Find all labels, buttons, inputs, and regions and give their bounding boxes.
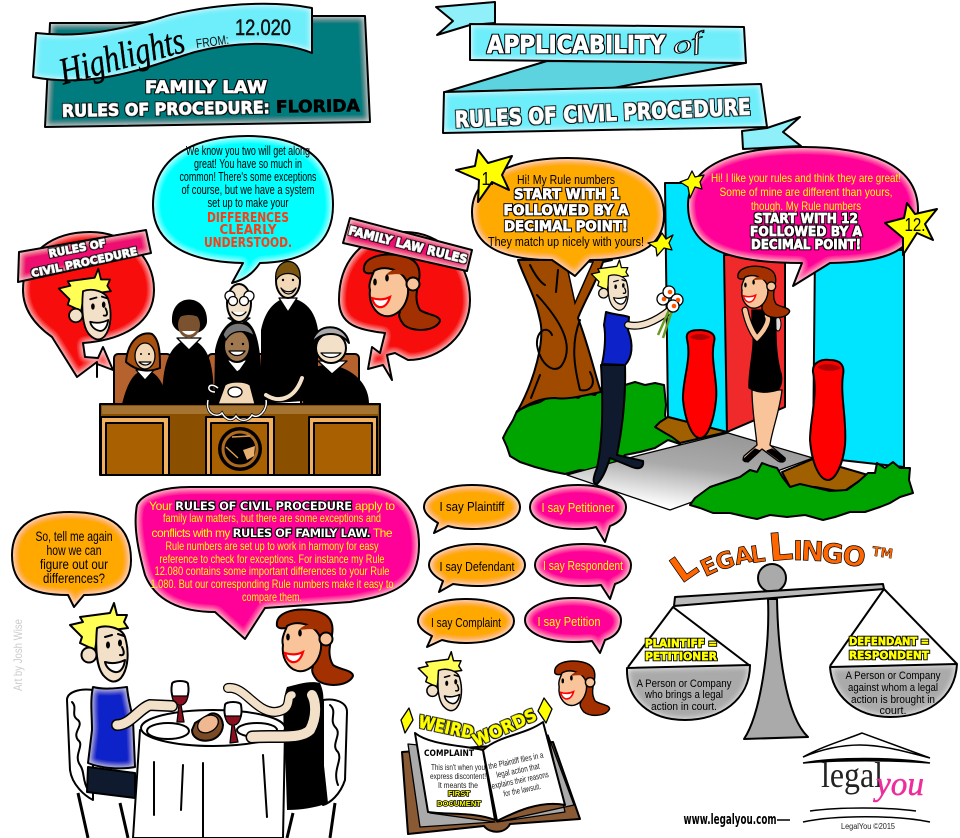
speech bubble: man at tree: DECIMAL POINT!	[504, 219, 628, 235]
bubble: i say respondent: I say Respondent	[543, 558, 623, 573]
speech bubble: your rules of civil procedure: compare them.	[242, 590, 302, 604]
judge: bald man with glasses	[214, 284, 262, 404]
heading: weird words: WORDS	[470, 705, 540, 751]
man arm	[117, 705, 172, 725]
speech bubble: so tell me again: figure out our	[40, 556, 108, 572]
speech bubble: your rules of civil procedure: 1.080. But our corresponding Rule numbers make it easy to	[150, 577, 394, 591]
book text left: DOCUMENT	[437, 801, 482, 808]
book page stack right	[497, 735, 574, 822]
ribbon label: family law rules: FAMILY LAW RULES	[347, 224, 469, 267]
wine glass right	[224, 702, 242, 743]
speech bubble: your rules of civil procedure: conflicts with my RULES OF FAMILY LAW. The	[152, 526, 393, 540]
heading: family law rules of procedure florida	[62, 78, 361, 122]
right bush	[690, 462, 913, 520]
bubble: i say defendant: I say Defendant	[440, 559, 515, 574]
bubble: i say plaintiff	[424, 485, 520, 533]
legs	[594, 365, 643, 484]
heading: family law rules of procedure florida: FLORIDA	[276, 96, 361, 118]
book text right: legal action that	[495, 761, 541, 780]
icon: star number 12	[885, 203, 937, 255]
ribbon: highlights from 12.020: Highlights	[54, 20, 189, 93]
website url: www.legalyou.com	[684, 812, 776, 828]
credit: art by josh wise: Art by Josh Wise	[11, 619, 25, 691]
shoes	[743, 449, 785, 462]
speech bubble: judges: DIFFERENCES	[207, 211, 289, 226]
speech bubble: judges: common! There's some exceptions	[180, 169, 317, 184]
speech bubble: woman at door: FOLLOWED BY A	[750, 225, 862, 240]
heading: legallingo: LEGALLINGO	[663, 524, 868, 591]
speech bubble: judges: of course, but we have a system	[182, 182, 314, 197]
speech bubble: your rules of civil procedure: family law matters, but there are some exceptions and	[163, 511, 381, 525]
bench panel left	[101, 417, 169, 475]
logo wordmark: legal: legal	[821, 755, 883, 795]
speech bubble: judges: set up to make your	[208, 195, 289, 210]
man pants	[87, 767, 135, 798]
speech bubble: man at tree: Hi! My Rule numbers	[517, 172, 615, 187]
ribbon: highlights from 12.020	[33, 4, 312, 93]
left pan: action in court.	[651, 701, 717, 713]
heading: family law rules of procedure florida: FAMILY LAW	[145, 78, 267, 98]
left pan: A Person or Company	[636, 678, 732, 690]
scale ball	[758, 564, 786, 592]
bubble: i say respondent	[535, 544, 631, 599]
dirt left	[655, 417, 727, 443]
icon: small man head	[418, 652, 462, 711]
right pan	[830, 589, 957, 717]
ribbon label: rules of civil procedure: CIVIL PROCEDURE	[30, 246, 138, 280]
speech bubble: woman at door: DECIMAL POINT!	[751, 238, 861, 253]
right pan: DEFENDANT =	[849, 635, 929, 648]
book text right: explains their reasons	[491, 769, 549, 791]
woman arm front	[252, 695, 315, 737]
icon: left diamond	[401, 708, 413, 733]
plates	[147, 723, 189, 739]
icon: man head	[59, 269, 111, 339]
ribbon upper with applicability	[470, 24, 746, 63]
book text left: COMPLAINT	[424, 749, 474, 759]
judge: center with grey hair	[213, 323, 264, 404]
vase right	[810, 360, 845, 480]
speech bubble: woman at door: START WITH 12	[754, 212, 858, 227]
heading: weird words: WEIRD	[417, 713, 476, 744]
speech bubble: judges: UNDERSTOOD.	[204, 236, 292, 251]
legalyou logo	[803, 733, 930, 831]
man shirt outline	[88, 687, 135, 768]
speech bubble: judges	[153, 136, 333, 283]
doorknob	[775, 317, 781, 331]
weird words book	[401, 698, 580, 834]
man shirt	[88, 687, 135, 768]
dress	[749, 310, 782, 392]
chair left	[67, 689, 128, 838]
book text left: This isn't when you	[431, 762, 485, 772]
judge: right with grey hair	[266, 327, 369, 404]
logo wordmark: you: you	[873, 766, 924, 803]
heading: weird words	[417, 705, 540, 751]
book text left: FIRST	[448, 791, 471, 798]
judges bench illustration	[100, 261, 380, 475]
door	[724, 255, 785, 432]
judge: woman left with auburn hair	[122, 333, 168, 404]
teal banner panel	[45, 16, 370, 127]
bubble: i say petitioner: I say Petitioner	[542, 500, 615, 515]
icon: small star pink bubble	[680, 171, 704, 198]
book text right	[486, 750, 551, 801]
judge: tall man back right	[261, 261, 318, 404]
dirt right	[782, 459, 868, 492]
ribbon upper with applicability: of	[670, 27, 710, 60]
ribbon label: rules of civil procedure: RULES OF	[48, 238, 107, 260]
icon: star number 1	[456, 150, 512, 202]
speech bubble: man at tree: They match up nicely with yours!	[488, 234, 644, 249]
man head	[70, 603, 128, 682]
left wall	[665, 183, 727, 432]
bread bowl	[192, 712, 223, 741]
ribbon: highlights from 12.020: 12.020	[235, 15, 291, 40]
speech bubble: man at tree	[472, 158, 664, 276]
left page	[415, 733, 495, 820]
head	[591, 260, 628, 310]
bubble: i say complaint	[418, 599, 514, 647]
right wall	[813, 250, 904, 467]
table	[133, 681, 285, 838]
legallingo scale	[627, 524, 957, 739]
vase left	[683, 330, 716, 438]
speech bubble: man at tree: START WITH 1	[514, 187, 620, 203]
right pan: action is brought in	[851, 694, 935, 706]
heading: applicability of rules of civil procedure	[436, 2, 801, 149]
tree	[517, 260, 612, 412]
woman in doorway	[738, 266, 790, 462]
bubble: i say petitioner	[530, 485, 626, 542]
speech bubble: man at tree: FOLLOWED BY A	[504, 203, 629, 219]
legs	[743, 390, 785, 462]
bench panel center	[206, 417, 274, 475]
ribbon fold	[445, 61, 745, 92]
right pan: against whom a legal	[848, 682, 938, 694]
speech bubble: woman at door	[688, 147, 918, 286]
book text right: the Plaintiff files in a	[487, 750, 544, 771]
bubble: i say complaint: I say Complaint	[431, 615, 501, 630]
ribbon tail upper	[436, 2, 495, 35]
red bubble: family law rules character	[339, 218, 472, 380]
speech bubble: so tell me again	[12, 512, 131, 607]
scale beam	[674, 584, 884, 606]
icon: star number 1: 1.	[482, 169, 494, 189]
right pan: A Person or Company	[846, 670, 941, 682]
icon: court seal	[218, 427, 262, 471]
heading: legallingo: TM	[871, 545, 894, 562]
logo roof	[803, 733, 930, 763]
book text right: for the lawsuit.	[502, 781, 542, 799]
standing man with flowers	[591, 260, 683, 484]
speech bubble: your rules of civil procedure: Rule numbers are set up to work in harmony for easy	[166, 539, 378, 553]
book page stack left	[408, 744, 495, 827]
red bubble: rules of civil procedure character	[18, 230, 154, 377]
house and garden scene	[503, 183, 913, 520]
book text left: express discontent!	[430, 771, 486, 781]
speech bubble: judges: CLEARLY	[220, 223, 277, 238]
woman head	[277, 610, 353, 685]
chair right	[287, 700, 347, 838]
ribbon tail lower	[742, 117, 801, 149]
judge: woman with black hair	[162, 300, 214, 404]
bubble: i say plaintiff: I say Plaintiff	[440, 499, 505, 514]
shirt	[602, 312, 632, 365]
right pan: RESPONDENT	[849, 649, 929, 662]
icon: woman head	[364, 255, 440, 330]
speech bubble: your rules of civil procedure: 12.080 contains some important differences to your Rule	[154, 564, 390, 578]
bouquet	[657, 286, 683, 338]
icon: small woman head	[555, 661, 610, 715]
speech bubble: woman at door: though. My Rule numbers	[751, 199, 861, 213]
book cover	[402, 742, 580, 834]
arm	[628, 310, 670, 326]
speech bubble: your rules of civil procedure: reference to check for exceptions. For instance my Rule	[160, 552, 385, 566]
left pan: PETITIONER	[645, 650, 718, 663]
woman dress	[283, 682, 328, 810]
speech bubble: judges: We know you two will get along	[186, 143, 310, 158]
judges bench desk	[100, 404, 380, 475]
left pan: PLAINTIFF =	[645, 637, 717, 650]
bubble: i say petition: I say Petition	[538, 614, 600, 629]
left bush	[503, 382, 680, 474]
heading: family law rules of procedure florida: RULES OF PROCEDURE:	[62, 98, 270, 122]
speech bubble: woman at door: Some of mine are different than yours,	[720, 185, 892, 199]
chairs	[114, 354, 359, 409]
ribbon: highlights from 12.020: FROM:	[195, 32, 230, 51]
head	[738, 266, 790, 318]
speech bubble: so tell me again: how we can	[46, 542, 102, 558]
ribbon label: rules of civil procedure	[18, 230, 151, 282]
left pan	[627, 607, 750, 720]
icon: right diamond	[538, 698, 552, 723]
arms	[745, 310, 768, 338]
ribbon upper with applicability: APPLICABILITY	[487, 30, 666, 59]
book text left: It meants the	[438, 780, 478, 790]
icon: small star	[648, 233, 673, 256]
speech bubble: your rules of civil procedure	[136, 487, 419, 639]
icon: star number 12: 12.	[904, 215, 926, 235]
book text left	[424, 749, 486, 808]
title banner: highlights	[33, 4, 370, 127]
speech bubble: judges: great! You have so much in	[194, 156, 302, 171]
left pan: who brings a legal	[644, 689, 723, 701]
scale post	[744, 599, 808, 739]
bench panel right	[309, 417, 377, 475]
icon: telephone	[208, 382, 266, 420]
bubble: i say petition	[525, 598, 621, 653]
logo lower arcs	[803, 808, 930, 822]
woman arm back	[228, 688, 292, 712]
bubble: i say defendant	[429, 544, 525, 592]
right page	[483, 722, 565, 821]
speech bubble: woman at door: Hi! I like your rules and think they are great!	[711, 171, 901, 185]
dinner scene	[67, 603, 353, 838]
walkway	[567, 433, 813, 510]
speech bubble: so tell me again: So, tell me again	[36, 528, 112, 544]
ribbon lower with rules of civil procedure: RULES OF CIVIL PROCEDURE	[454, 96, 751, 133]
copyright: LegalYou ©2015	[841, 822, 895, 831]
wine glass left	[171, 681, 189, 722]
speech bubble: so tell me again: differences?	[43, 570, 105, 586]
speech bubble: your rules of civil procedure: Your RULES OF CIVIL PROCEDURE apply to	[149, 499, 395, 513]
right pan: court.	[880, 705, 906, 717]
